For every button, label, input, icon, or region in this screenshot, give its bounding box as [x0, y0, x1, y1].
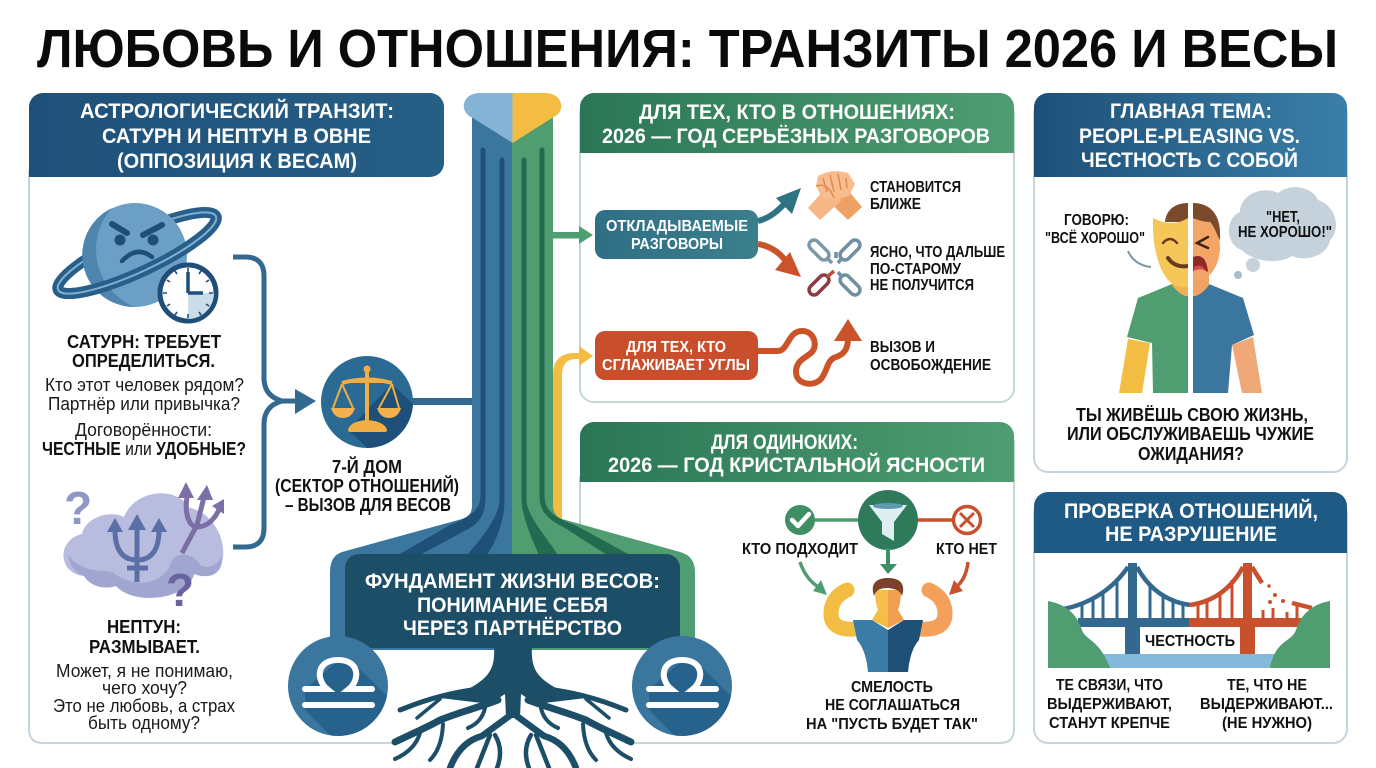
connector: house to trunk — [410, 398, 474, 405]
trunk: green half — [512, 110, 695, 650]
text: who not: КТО НЕТ — [936, 541, 997, 558]
header: in relationships — [580, 93, 1014, 153]
text: courage: НЕ СОГЛАШАТЬСЯ — [825, 697, 960, 714]
icon: filter with check and cross — [785, 490, 980, 550]
text: connections that do not hold: ТЕ, ЧТО НЕ — [1227, 677, 1307, 694]
panel: astrological transit — [29, 93, 474, 743]
panel: in relationships — [580, 93, 1014, 402]
icon: neptune cloud with tridents: ? — [166, 564, 194, 616]
header: astrological transit: АСТРОЛОГИЧЕСКИЙ ТРАНЗИТ: — [80, 99, 394, 123]
header: singles — [580, 422, 1014, 482]
icon: libra right — [632, 636, 732, 736]
central tree trunk — [330, 93, 695, 650]
foundation box text: ФУНДАМЕНТ ЖИЗНИ ВЕСОВ: — [365, 570, 660, 593]
icon: neptune cloud with tridents — [63, 482, 224, 616]
text: courage: НА "ПУСТЬ БУДЕТ ТАК" — [806, 716, 978, 733]
trunk lines — [398, 148, 630, 555]
text: says everything fine — [1045, 212, 1151, 267]
box: smoothing corners — [595, 331, 758, 380]
text: broken: ЯСНО, ЧТО ДАЛЬШЕ — [870, 244, 1005, 261]
text: says everything fine: "ВСЁ ХОРОШО" — [1045, 230, 1145, 247]
panel: main theme — [1034, 93, 1347, 472]
box: smoothing corners: СГЛАЖИВАЕТ УГЛЫ — [602, 357, 750, 374]
arrow: planets converge to seventh house — [233, 257, 316, 547]
panel: singles — [580, 422, 1014, 743]
foundation box text: ПОНИМАНИЕ СЕБЯ — [417, 594, 608, 617]
text: broken: ПО-СТАРОМУ — [870, 261, 961, 278]
icon: saturn with clock — [50, 199, 224, 321]
text: neptune: РАЗМЫВАЕТ. — [89, 637, 200, 657]
text: neptune: Может, я не понимаю, — [56, 661, 233, 681]
text: seventh house: 7-Й ДОМ — [332, 456, 402, 477]
box: postponed talks — [595, 210, 758, 259]
text: broken — [870, 244, 1005, 294]
text: connections that hold: ВЫДЕРЖИВАЮТ, — [1047, 696, 1172, 713]
text: connections that hold — [1047, 677, 1172, 732]
header: singles: 2026 — ГОД КРИСТАЛЬНОЙ ЯСНОСТИ — [608, 453, 985, 477]
box: postponed talks: РАЗГОВОРЫ — [631, 236, 723, 253]
text: who fits: КТО ПОДХОДИТ — [742, 541, 858, 558]
text: neptune: НЕПТУН: — [107, 617, 181, 637]
arrow: to broken — [758, 244, 801, 277]
icon: broken chains — [807, 238, 862, 297]
header: astrological transit — [29, 93, 444, 177]
text: neptune: быть одному? — [88, 713, 200, 733]
text: connections that hold: СТАНУТ КРЕПЧЕ — [1049, 715, 1170, 732]
text: saturn: Партнёр или привычка? — [48, 394, 240, 414]
text: neptune: Это не любовь, а страх — [53, 696, 235, 716]
roots — [395, 646, 631, 768]
header: in relationships: ДЛЯ ТЕХ, КТО В ОТНОШЕНИЯХ: — [639, 101, 955, 124]
header: astrological transit: (ОППОЗИЦИЯ К ВЕСАМ) — [117, 150, 357, 173]
foundation box text: ЧЕРЕЗ ПАРТНЁРСТВО — [403, 617, 622, 640]
text: honesty label: ЧЕСТНОСТЬ — [1145, 633, 1235, 650]
text: connections that hold: ТЕ СВЯЗИ, ЧТО — [1056, 677, 1163, 694]
box: postponed talks: ОТКЛАДЫВАЕМЫЕ — [606, 218, 748, 235]
trunk cap — [464, 93, 561, 143]
text: seventh house — [275, 456, 459, 515]
icon: half-broken bridge — [1048, 563, 1330, 668]
panel: relationship check — [1034, 492, 1347, 743]
text: challenge — [870, 339, 991, 374]
text: saturn: ЧЕСТНЫЕ или УДОБНЫЕ? — [42, 439, 246, 459]
text: connections that do not hold: ВЫДЕРЖИВАЮТ... — [1200, 696, 1333, 713]
box: smoothing corners: ДЛЯ ТЕХ, КТО — [626, 339, 726, 356]
text: closer: БЛИЖЕ — [870, 196, 921, 213]
text: closer: СТАНОВИТСЯ — [870, 179, 961, 196]
text: says everything fine: ГОВОРЮ: — [1064, 212, 1129, 229]
header: relationship check — [1034, 492, 1347, 553]
text: connections that do not hold — [1200, 677, 1333, 732]
foundation box text — [345, 554, 680, 648]
text: broken: НЕ ПОЛУЧИТСЯ — [870, 277, 974, 294]
arrow: yellow branch — [553, 346, 593, 520]
text: saturn: Договорённости: — [75, 420, 212, 440]
icon: libra left — [288, 636, 388, 736]
icon: split person with mask — [1119, 203, 1262, 393]
text: question: ИЛИ ОБСЛУЖИВАЕШЬ ЧУЖИЕ — [1067, 424, 1314, 444]
header: relationship check: ПРОВЕРКА ОТНОШЕНИЙ, — [1064, 499, 1318, 523]
text: saturn: САТУРН: ТРЕБУЕТ — [67, 332, 221, 352]
text: question — [1067, 405, 1314, 464]
arrow: trunk to relationships — [553, 226, 593, 244]
text: saturn: Кто этот человек рядом? — [45, 375, 244, 395]
header: main theme — [1034, 93, 1347, 177]
trunk: blue half — [330, 110, 513, 650]
header: astrological transit: САТУРН И НЕПТУН В ОВНЕ — [102, 125, 371, 148]
arrow: to closer — [758, 188, 801, 221]
text: challenge: ОСВОБОЖДЕНИЕ — [870, 357, 991, 374]
text: question: ТЫ ЖИВЁШЬ СВОЮ ЖИЗНЬ, — [1076, 405, 1308, 425]
text: seventh house: – ВЫЗОВ ДЛЯ ВЕСОВ — [285, 495, 451, 515]
text: question: ОЖИДАНИЯ? — [1138, 444, 1244, 464]
text: connections that do not hold: (НЕ НУЖНО) — [1222, 715, 1312, 732]
text: courage — [806, 679, 978, 733]
icon: strong person — [831, 578, 945, 672]
thought bubble — [1229, 187, 1336, 279]
text: saturn — [42, 332, 246, 459]
arrow: winding path — [758, 319, 862, 384]
text: closer — [870, 179, 961, 213]
text: challenge: ВЫЗОВ И — [870, 339, 935, 356]
arrows: toward person — [800, 548, 968, 595]
thought bubble: "НЕТ, — [1266, 209, 1300, 226]
text: courage: СМЕЛОСТЬ — [851, 679, 933, 696]
icon: neptune cloud with tridents: ? — [64, 482, 92, 534]
icon: scales — [321, 356, 413, 448]
header: main theme: PEOPLE-PLEASING VS. — [1079, 125, 1300, 148]
text: seventh house: (СЕКТОР ОТНОШЕНИЙ) — [275, 475, 459, 496]
thought bubble: НЕ ХОРОШО!" — [1238, 224, 1332, 241]
header: relationship check: НЕ РАЗРУШЕНИЕ — [1105, 523, 1277, 546]
header: main theme: ГЛАВНАЯ ТЕМА: — [1110, 100, 1272, 123]
text: neptune: чего хочу? — [102, 678, 187, 698]
icon: clasped hands — [808, 171, 862, 220]
header: singles: ДЛЯ ОДИНОКИХ: — [711, 431, 858, 454]
header: in relationships: 2026 — ГОД СЕРЬЁЗНЫХ РАЗГОВОРОВ — [602, 125, 990, 148]
text: saturn: ОПРЕДЕЛИТЬСЯ. — [72, 351, 215, 371]
header: main theme: ЧЕСТНОСТЬ С СОБОЙ — [1081, 148, 1298, 172]
text: neptune — [53, 617, 235, 733]
